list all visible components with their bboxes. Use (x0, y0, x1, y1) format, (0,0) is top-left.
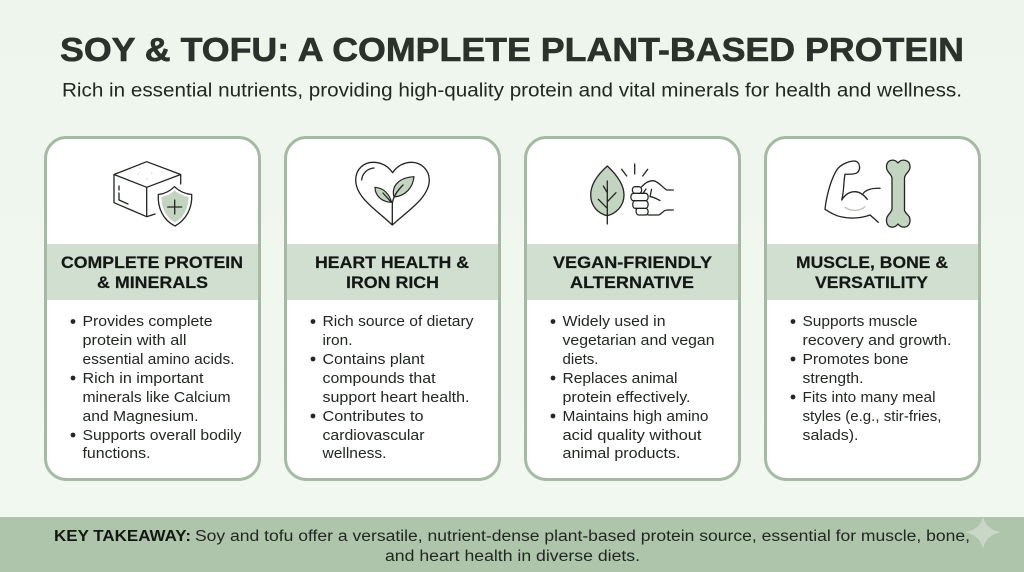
heading band (527, 244, 738, 300)
bullet list: minerals like Calcium (82, 389, 230, 406)
bullet list: Rich source of dietary (322, 313, 474, 330)
icon: leaf and fist (591, 164, 673, 224)
heading: VEGAN-FRIENDLY (553, 253, 713, 272)
bullet list (791, 313, 952, 444)
bullet list (311, 313, 474, 462)
bullet list: Rich in important (82, 370, 204, 387)
heading band (767, 244, 978, 300)
heading: MUSCLE, BONE & (796, 253, 948, 272)
bullet list: acid quality without (562, 427, 702, 444)
bullet list: recovery and growth. (802, 332, 952, 349)
icon: heart with sprout (356, 162, 429, 225)
bullet list: Widely used in (562, 313, 666, 330)
bullet list: cardiovascular (322, 427, 424, 444)
card frame (766, 138, 980, 480)
heading (315, 253, 469, 292)
panel: vegan-friendly alternative (526, 138, 740, 480)
heading: ALTERNATIVE (570, 273, 694, 292)
heading: IRON RICH (346, 273, 439, 292)
bullet list (71, 313, 242, 462)
bullet list: Supports overall bodily (82, 427, 242, 444)
card frame (526, 138, 740, 480)
heading band (47, 244, 258, 300)
bullet list: Contributes to (322, 408, 424, 425)
subtitle: Rich in essential nutrients, providing high-quality protein and vital minerals for health and wellness. (62, 80, 962, 102)
takeaway text: KEY TAKEAWAY: (54, 528, 191, 545)
bullet list: Promotes bone (802, 351, 908, 368)
bullet list: styles (e.g., stir-fries, (802, 408, 942, 425)
footer: key takeaway (0, 516, 1024, 572)
bullet list: animal products. (562, 445, 680, 462)
panel: heart health and iron (286, 138, 500, 480)
heading (553, 253, 713, 292)
bullet list: Fits into many meal (802, 389, 936, 406)
bullet list: Maintains high amino (562, 408, 708, 425)
bullet list: support heart health. (322, 389, 470, 406)
heading (61, 253, 243, 292)
bullet list: protein with all (82, 332, 186, 349)
title: SOY & TOFU: A COMPLETE PLANT-BASED PROTEIN (60, 32, 964, 69)
bullet list (551, 313, 714, 462)
bullet list: strength. (802, 370, 864, 387)
bullet list: diets. (562, 351, 598, 368)
bullet list: compounds that (322, 370, 436, 387)
card frame (286, 138, 500, 480)
takeaway text: and heart health in diverse diets. (385, 548, 640, 565)
heading: COMPLETE PROTEIN (61, 253, 243, 272)
takeaway text: Soy and tofu offer a versatile, nutrient-dense plant-based protein source, essential for muscle, bone, (195, 528, 970, 545)
bullet list: iron. (322, 332, 352, 349)
bullet list: Replaces animal (562, 370, 678, 387)
bullet list: functions. (82, 445, 150, 462)
heading: HEART HEALTH & (315, 253, 469, 272)
panel: muscle, bone and versatility (766, 138, 980, 480)
heading: & MINERALS (97, 273, 208, 292)
bullet list: vegetarian and vegan (562, 332, 714, 349)
heading: VERSATILITY (815, 273, 929, 292)
icon: tofu block with shield (114, 162, 192, 226)
bullet list: Supports muscle (802, 313, 918, 330)
panel: complete protein and minerals (46, 138, 260, 480)
footer band (0, 517, 1024, 572)
bullet list: salads). (802, 427, 858, 444)
bullet list: Contains plant (322, 351, 425, 368)
bullet list: and Magnesium. (82, 408, 198, 425)
icon: sparkle (965, 516, 1001, 549)
bullet list: Provides complete (82, 313, 212, 330)
heading (796, 253, 948, 292)
heading band (287, 244, 498, 300)
takeaway text (54, 528, 970, 565)
bullet list: wellness. (321, 445, 386, 462)
bullet list: protein effectively. (562, 389, 690, 406)
icon: flexed arm and bone (825, 160, 910, 227)
bullet list: essential amino acids. (82, 351, 234, 368)
card frame (46, 138, 260, 480)
